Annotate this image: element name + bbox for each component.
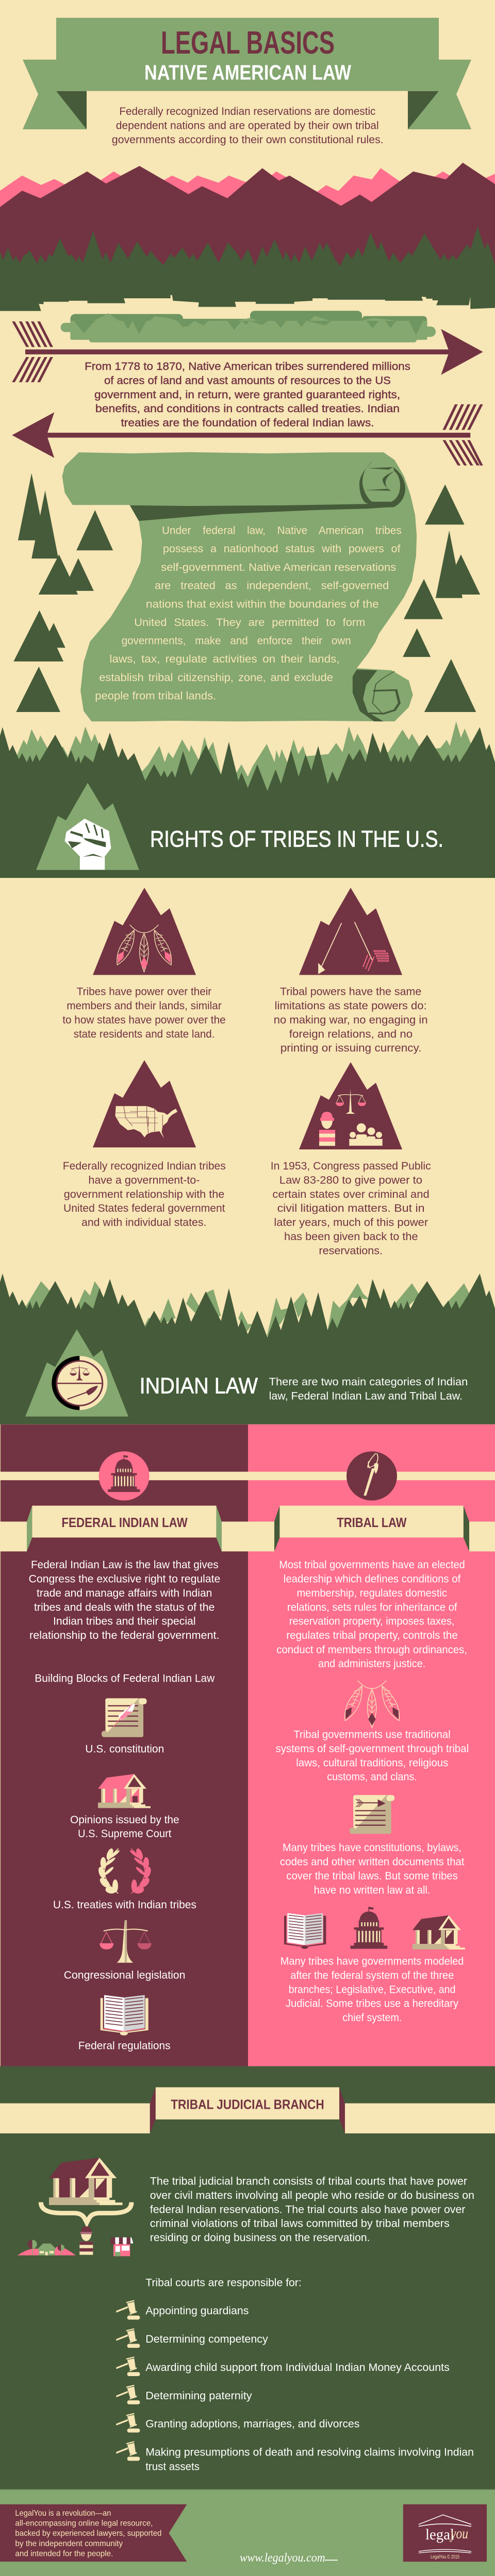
label: Supreme Court opinions [70, 1813, 179, 1840]
text: tribes have power [62, 985, 226, 1040]
right 4: Public Law 83-280 [271, 1062, 431, 1257]
text: written documents: have no written law at all. [314, 1884, 430, 1896]
logo: LegalYou: LegalYou © 2015 [431, 2554, 459, 2560]
text: tribes have power: Tribes have power over their [77, 985, 211, 998]
list item: determining paternity: Determining paternity [145, 2389, 252, 2402]
text: tribal governments: conduct of members through ordinances, [276, 1643, 467, 1656]
list item: presumptions of death: trust assets [145, 2460, 200, 2472]
text: 1953 Congress: later years, much of this power [274, 1216, 428, 1228]
text: 1953 Congress [271, 1159, 431, 1257]
icon: courthouse [98, 1774, 151, 1808]
text: federally recognized tribes [63, 1159, 226, 1228]
list item: presumptions of death: Making presumptions of death and resolving claims involving Indian [145, 2446, 474, 2458]
subheading: building blocks: Building Blocks of Federal Indian Law [35, 1672, 215, 1684]
title banner [23, 18, 471, 129]
text: 1953 Congress: certain states over criminal and [272, 1188, 430, 1200]
text: tribal powers limits: no making war, no engaging in [274, 1013, 428, 1026]
lake reflection [61, 311, 436, 343]
scroll text: establish tribal citizenship, zone, and exclude [99, 671, 333, 684]
text: federally recognized tribes: have a government-to- [88, 1174, 200, 1186]
text: 1953 Congress: has been given back to the [284, 1230, 418, 1243]
text: federally recognized tribes: and with individual states. [81, 1216, 206, 1228]
treaties text: treaties are the foundation of federal Indian laws. [121, 416, 374, 429]
text: federally recognized tribes: United States federal government [63, 1201, 225, 1214]
treaties text: benefits, and conditions in contracts called treaties. Indian [95, 402, 400, 415]
text: tribal governments: and administers justice. [318, 1657, 425, 1670]
text: tribal powers limits: foreign relations, and no [289, 1027, 412, 1040]
text: tribes have power: members and their lands, similar [67, 999, 222, 1012]
heading: Native American Law: NATIVE AMERICAN LAW [144, 60, 352, 84]
text: federal law definition: trade and manage affairs with Indian [37, 1586, 212, 1599]
text: 1953 Congress: civil litigation matters. But in [277, 1201, 425, 1214]
text: tribal governments: reservation property, imposes taxes, [289, 1615, 455, 1628]
text: traditional systems [275, 1728, 469, 1783]
text: federal law definition [29, 1558, 220, 1641]
scroll text: laws, tax, regulate activities on their lands, [109, 653, 340, 665]
text: tribal governments: Most tribal governments have an elected [279, 1558, 465, 1571]
text: written documents: codes and other written documents that [280, 1855, 465, 1868]
treaties text [85, 360, 410, 429]
text: federally recognized tribes: Federally recognized Indian tribes [63, 1159, 226, 1172]
intro text: governments according to their own constitutional rules. [112, 133, 384, 146]
intro text: dependent nations and are operated by their own tribal [116, 119, 379, 131]
forest band: rights section [0, 721, 495, 878]
logo: LegalYou [403, 2504, 487, 2562]
icon: feathers [345, 1681, 399, 1728]
right 2: limitations [274, 888, 428, 1054]
arrow pointing right [12, 321, 483, 382]
icon: arrows in mountain [299, 888, 402, 975]
ribbon: federal Indian law [0, 1505, 248, 1551]
footer ribbon: about LegalYou: all-encompassing online legal resource, [15, 2519, 153, 2528]
scroll text: nations that exist within the boundaries of the [146, 598, 379, 610]
text: tribes have power: state residents and state land. [74, 1027, 214, 1040]
intro text [269, 1376, 468, 1402]
icon: feathers in mountain [93, 888, 196, 975]
footer ribbon: about LegalYou: LegalYou is a revolution—an [15, 2509, 111, 2518]
text: tribal governments: regulates tribal property, controls the [286, 1629, 458, 1641]
text: tribal governments: leadership which defines conditions of [284, 1572, 461, 1585]
label: treaties: U.S. treaties with Indian tribes [53, 1898, 196, 1911]
treaties text: government and, in return, were granted guaranteed rights, [94, 388, 400, 401]
panel: tribal judicial branch [0, 2066, 495, 2490]
scroll text [95, 524, 402, 702]
treaties text: of acres of land and vast amounts of resources to the US [104, 374, 391, 386]
text: federal law definition: Congress the exclusive right to regulate [29, 1572, 220, 1585]
logo: LegalYou: legal [425, 2527, 454, 2543]
label: Congressional legislation: Congressional legislation [64, 1969, 185, 1981]
scroll text: governments, make and enforce their own [122, 634, 351, 647]
text: written documents: cover the tribal laws. But some tribes [286, 1869, 458, 1882]
scroll text: self-government. Native American reservations [161, 561, 396, 573]
text: tribal powers limits: limitations as state powers do: [275, 999, 427, 1012]
icon: capitol in circle [99, 1451, 150, 1501]
text: modeled after federal: Judicial. Some tribes use a hereditary [286, 1997, 458, 2010]
text: tribal powers limits [274, 985, 428, 1054]
text: modeled after federal: branches; Legislative, Executive, and [289, 1983, 456, 1995]
list heading: Tribal courts are responsible for: [145, 2276, 302, 2289]
text: 1953 Congress: reservations. [319, 1244, 383, 1257]
icon: scales [100, 1920, 152, 1963]
icon: balance badge in mountain [25, 1329, 128, 1417]
label: Supreme Court opinions: U.S. Supreme Court [78, 1827, 171, 1840]
scroll text: possess a nationhood status with powers of [163, 542, 401, 555]
list item: adoptions [116, 2413, 359, 2433]
trees around the scroll [13, 473, 480, 712]
text: tribal governments [276, 1558, 467, 1670]
text: modeled after federal: after the federal system of the three [290, 1969, 454, 1981]
text: judicial branch description: criminal violations of tribal laws committed by tribal members [150, 2217, 450, 2230]
list item: determining paternity [116, 2385, 252, 2404]
text: federal law definition: relationship to the federal government. [29, 1629, 220, 1641]
ribbon: tribal judicial branch: TRIBAL JUDICIAL BRANCH [171, 2097, 324, 2112]
intro text: There are two main categories of Indian [269, 1376, 468, 1388]
list item: determining competency [116, 2328, 268, 2348]
ribbon: federal Indian law: FEDERAL INDIAN LAW [61, 1515, 188, 1530]
ribbon: tribal law: TRIBAL LAW [337, 1515, 407, 1530]
intro text: law, Federal Indian Law and Tribal Law. [269, 1389, 463, 1402]
list item: child support: Awarding child support from Individual Indian Money Accounts [145, 2361, 450, 2374]
landscape: mountains and treeline [0, 163, 495, 311]
text: judicial branch description: over civil matters involving all people who reside or do business on [150, 2189, 474, 2201]
ribbon: tribal law [248, 1505, 495, 1551]
text: judicial branch description [150, 2175, 474, 2244]
text: tribes have power: to how states have power over the [62, 1013, 226, 1026]
footer ribbon: about LegalYou: backed by experienced lawyers, supported [15, 2529, 161, 2538]
list item: child support [116, 2357, 450, 2376]
list item: adoptions: Granting adoptions, marriages, and divorces [145, 2417, 359, 2430]
text: traditional systems: customs, and clans. [327, 1770, 417, 1783]
right 3: government-to-government [63, 1060, 226, 1228]
footer [0, 2489, 495, 2576]
footer ribbon: about LegalYou: and intended for the people. [15, 2550, 113, 2558]
text: federally recognized tribes: government relationship with the [64, 1188, 224, 1200]
treaties text: From 1778 to 1870, Native American tribes surrendered millions [85, 360, 410, 372]
footer ribbon: about LegalYou [0, 2504, 187, 2562]
text: modeled after federal: Many tribes have governments modeled [280, 1955, 464, 1968]
scroll text: are treated as independent, self-governed [155, 579, 389, 592]
intro text: Federally recognized Indian reservations are domestic [119, 105, 376, 117]
icons: three branches [284, 1907, 465, 1950]
icon: laurel [97, 1848, 152, 1895]
list item: determining competency: Determining competency [145, 2332, 268, 2345]
text: traditional systems: systems of self-government through tribal [275, 1742, 469, 1755]
list item: appointing guardians: Appointing guardians [145, 2304, 249, 2317]
list item: appointing guardians [116, 2300, 249, 2319]
icon: open book [101, 1995, 148, 2036]
text: tribal governments: membership, regulates domestic [297, 1586, 447, 1599]
label: U.S. constitution: U.S. constitution [85, 1742, 164, 1755]
list item: presumptions of death [116, 2441, 474, 2472]
section header: rights of tribes [36, 783, 443, 870]
icon: spear in circle [346, 1451, 397, 1501]
logo: LegalYou: you [450, 2526, 468, 2542]
label: federal regulations: Federal regulations [78, 2039, 171, 2052]
section header: Indian law [25, 1329, 468, 1417]
website url: www.legalyou.com [240, 2551, 325, 2565]
label: Supreme Court opinions: Opinions issued by the [70, 1813, 179, 1826]
footer ribbon: about LegalYou: by the independent community [15, 2539, 123, 2548]
text: 1953 Congress: In 1953, Congress passed Public [271, 1159, 431, 1172]
icon: constitution scroll [102, 1698, 146, 1737]
text: federal law definition: Federal Indian Law is the law that gives [31, 1558, 219, 1571]
icon: fist in mountain [36, 783, 139, 870]
text: modeled after federal [280, 1955, 464, 2024]
text: tribal governments: relations, sets rules for inheritance of [287, 1601, 457, 1613]
heading: Indian law: INDIAN LAW [140, 1374, 258, 1398]
scroll text: Under federal law, Native American tribes [162, 524, 402, 536]
text: tribal powers limits: printing or issuing currency. [280, 1042, 421, 1054]
forest band: Indian law section [0, 1274, 495, 1425]
panel: tribal law [248, 1425, 495, 2066]
scroll text: United States. They are permitted to form [134, 616, 365, 629]
list: court responsibilities [116, 2300, 474, 2472]
text: tribal powers limits: Tribal powers have the same [280, 985, 421, 998]
icon: scales, prisoner and group in mountain [299, 1062, 402, 1149]
text: federal law definition: tribes and deals with the status of the [34, 1601, 214, 1613]
text: written documents [280, 1841, 465, 1896]
text: traditional systems: Tribal governments use traditional [293, 1728, 451, 1740]
arrow pointing left [12, 404, 483, 465]
icon: scroll with arrow [350, 1795, 394, 1834]
text: modeled after federal: chief system. [342, 2011, 402, 2024]
text: judicial branch description: federal Indian reservations. The trial courts also have power over [150, 2203, 465, 2215]
scroll text: people from tribal lands. [95, 689, 216, 702]
heading: Legal Basics: LEGAL BASICS [161, 25, 335, 61]
ribbon: tribal judicial branch [0, 2087, 495, 2133]
text: judicial branch description: The tribal judicial branch consists of tribal courts that have power [150, 2175, 467, 2187]
panel: federal Indian law [0, 1425, 248, 2066]
text: federal law definition: Indian tribes and their special [53, 1615, 196, 1628]
text: written documents: Many tribes have constitutions, bylaws, [283, 1841, 461, 1854]
icon: US map in mountain [93, 1060, 196, 1147]
text: traditional systems: laws, cultural traditions, religious [296, 1756, 449, 1769]
text: judicial branch description: residing or doing business on the reservation. [150, 2231, 370, 2244]
right 1: power over members [62, 888, 226, 1040]
parchment scroll [62, 452, 417, 721]
text: 1953 Congress: Law 83-280 to give power to [279, 1174, 422, 1186]
intro text [112, 105, 384, 146]
icon: courthouse with community [18, 2158, 133, 2256]
